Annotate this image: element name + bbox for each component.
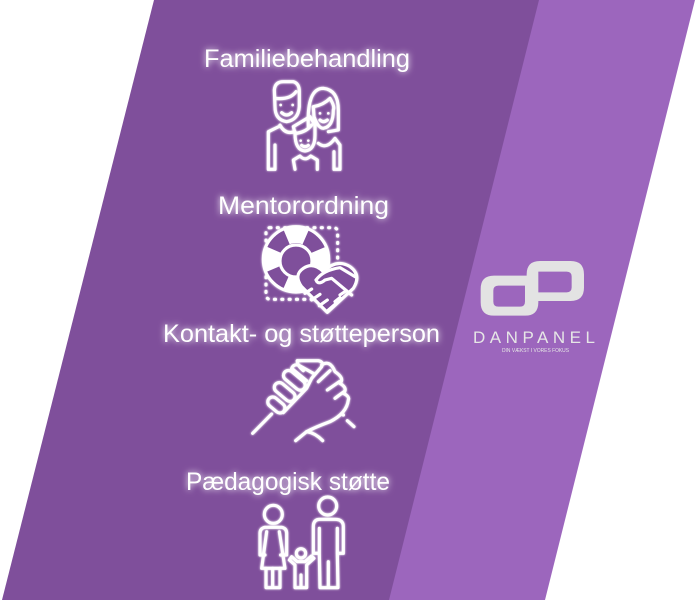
heading: Pædagogisk støtte: Pædagogisk støtte bbox=[186, 468, 390, 496]
icon: lifebuoy with handshake bbox=[263, 227, 357, 312]
heading: Familiebehandling: Familiebehandling bbox=[204, 45, 410, 73]
panel: dark purple band bbox=[2, 0, 539, 600]
icon: clasped hands bbox=[253, 361, 354, 441]
heading: Kontakt- og støtteperson: Kontakt- og støtteperson bbox=[163, 320, 440, 348]
heading: Mentorordning: Mentorordning bbox=[218, 192, 389, 220]
logo wordmark: DANPANEL bbox=[473, 328, 595, 347]
panel: light purple band bbox=[380, 0, 695, 600]
logo tagline: DIN VÆKST I VORES FOKUS bbox=[502, 348, 569, 354]
icon: family bbox=[268, 82, 340, 169]
logo mark: linked rounded rectangles bbox=[481, 261, 584, 316]
icon: parents and child bbox=[260, 497, 343, 588]
logo: Danpanel bbox=[473, 261, 595, 354]
